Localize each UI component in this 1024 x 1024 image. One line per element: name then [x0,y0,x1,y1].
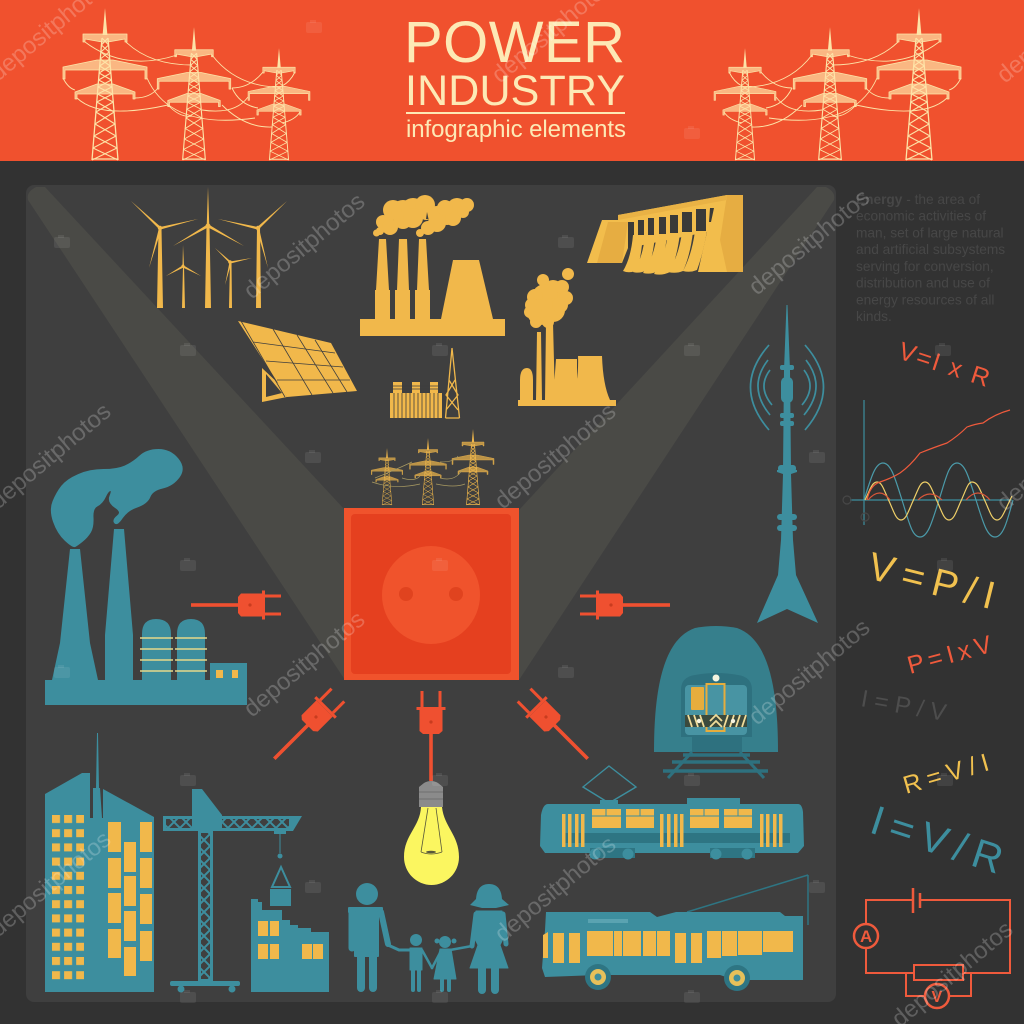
formula: I=P/V: I = P / V [859,685,948,727]
formula: V=P/I: V = P / I [864,545,999,618]
icon: tram [540,766,804,860]
text block: energy definition: distribution and use of [856,276,990,290]
icon: solar panel [238,321,357,402]
watermarks: depositphotos [490,398,621,515]
plug: bottom centre [416,691,446,781]
plug: left [191,590,281,620]
watermarks: depositphotos [744,184,875,301]
text block: energy definition: economic activities of [856,208,986,224]
title: POWER [404,10,625,75]
title: INDUSTRY [405,67,625,115]
formula: I=V/R: I = V / R [865,797,1009,883]
icon: wind turbines [131,187,287,308]
icon: left factory [45,450,247,705]
watermarks: depositphotos [239,606,370,723]
watermarks: depositphotos [239,188,370,305]
icon: small substation [390,348,460,418]
text block: energy definition: energy resources of all [856,292,994,308]
icon: trolleybus [542,875,808,991]
formula: V=IxR: V=I x R [895,337,993,393]
formula: R=V/I: R = V / I [900,749,992,800]
circuit diagram [854,888,1010,1008]
panel: main [26,185,836,1002]
formula: P=IxV: P = I x V [904,630,995,680]
light beam left [28,187,345,680]
chart: voltage and current curves [843,400,1013,537]
light beam right [519,187,834,680]
title: infographic elements [406,116,626,143]
icon: skyscraper [45,733,154,992]
plug: bottom left [264,685,348,769]
icon: coal power plant [360,195,505,336]
icon: TV tower [750,305,824,623]
header band [0,0,1024,161]
icon: hydro dam [587,195,743,275]
socket [344,508,519,680]
icon: family [349,883,509,990]
icon: crane [163,789,302,992]
icon: gold pylons [371,429,494,505]
icon: building under construction [251,899,329,992]
text block: energy definition: man, set of large natural [856,226,1004,240]
icon: light bulb [404,781,459,885]
title [404,10,626,143]
watermarks: depositphotos [744,614,875,731]
circuit diagram: V [932,989,942,1006]
circuit diagram: A [860,927,872,946]
icon: nuclear plant [518,268,616,406]
watermarks: depositphotos [490,831,621,948]
plug: bottom right [514,685,598,769]
icon: metro train in tunnel [654,626,778,778]
icon: right pylons [714,8,961,160]
text block: energy definition: Energy - the area of [856,192,980,207]
plug: right [580,590,670,620]
icon: left pylons [63,8,310,160]
text block: energy definition: serving for conversion, [856,259,994,274]
text block: energy definition: and artificial subsystems [856,242,1005,257]
text block: energy definition: kinds. [856,309,892,324]
